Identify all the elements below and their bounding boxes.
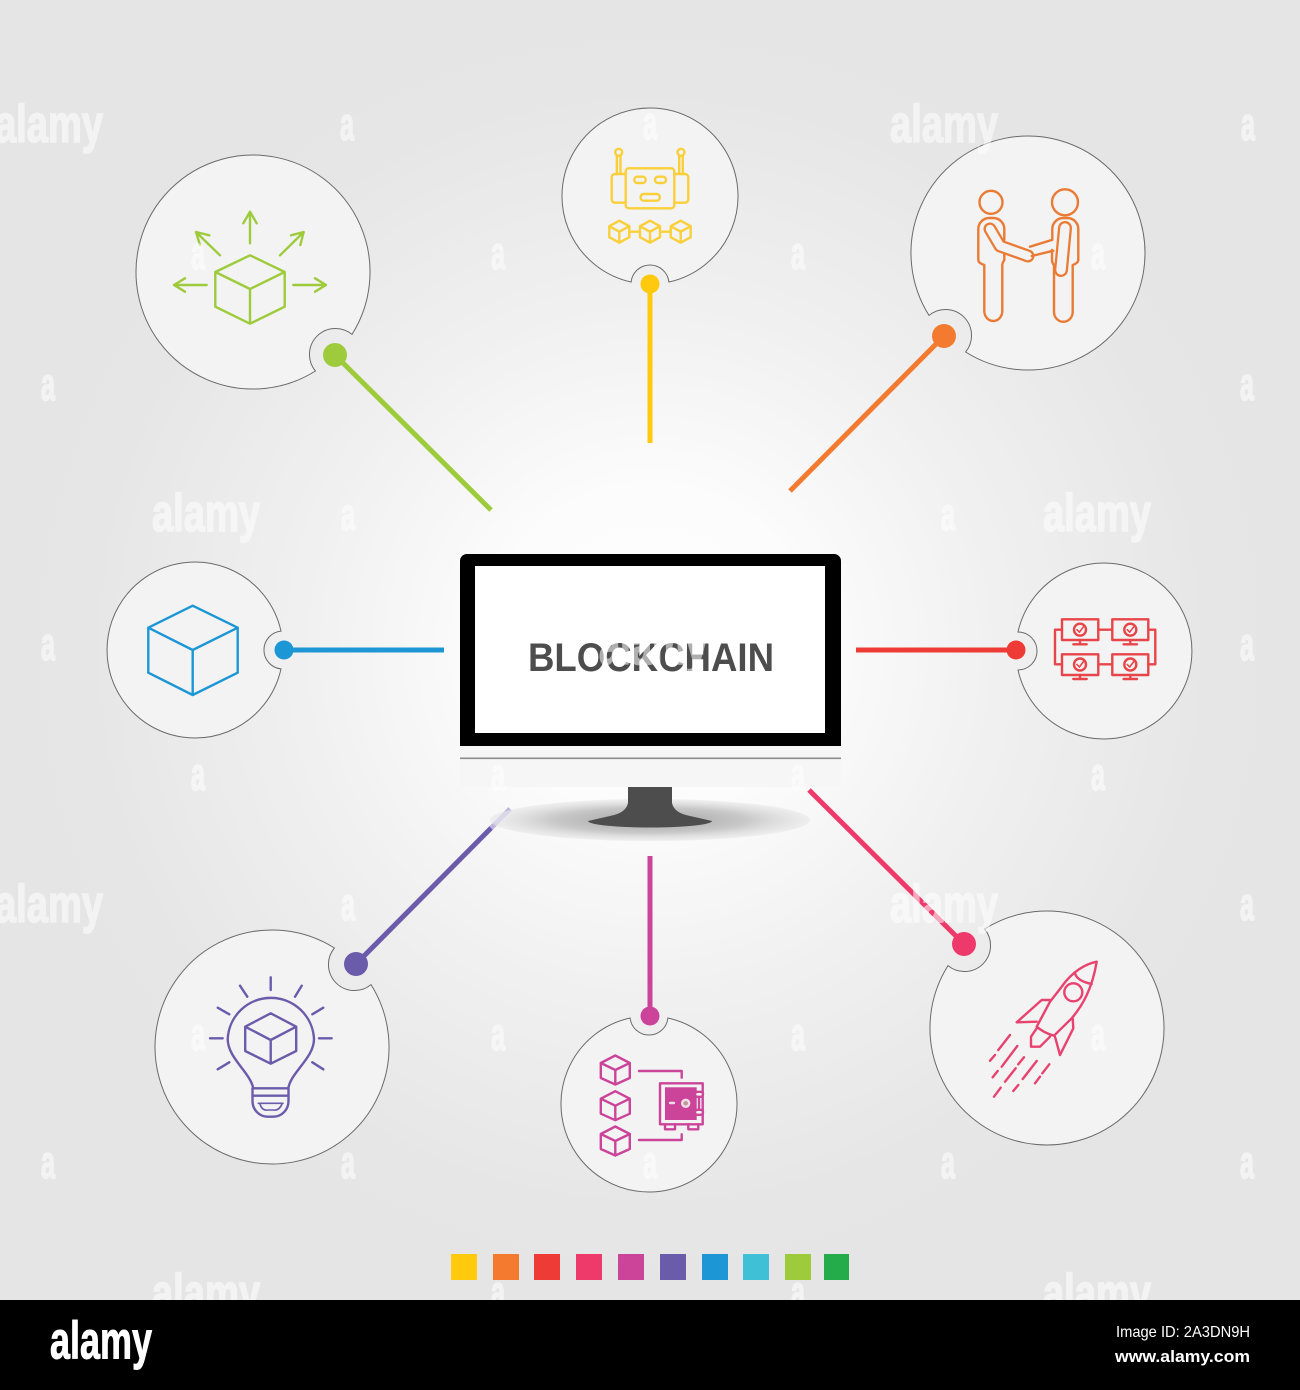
- watermarks: a: [41, 1136, 55, 1188]
- watermarks: alamy: [152, 1264, 260, 1323]
- circle with notch: [911, 136, 1145, 370]
- monitor screen: [475, 566, 825, 733]
- watermarks: a: [1240, 1136, 1254, 1188]
- circle with notch: [561, 1018, 737, 1192]
- panel: magenta safe: [561, 856, 737, 1192]
- watermarks: a: [791, 227, 805, 279]
- footer logo: alamy: [50, 1312, 152, 1370]
- circle with notch: [1018, 563, 1192, 739]
- icon: handshake: [978, 189, 1078, 322]
- watermarks: a: [1240, 618, 1254, 670]
- watermarks: a: [191, 1008, 205, 1060]
- watermarks: a: [341, 878, 355, 930]
- icon: light bulb with cube: [210, 977, 332, 1117]
- watermarks: a: [191, 227, 205, 279]
- panel: yellow robot: [562, 108, 738, 443]
- icon: robot and chain: [609, 149, 691, 243]
- watermarks: a: [1091, 227, 1105, 279]
- icon: rocket: [990, 962, 1097, 1097]
- watermarks: a: [1241, 98, 1255, 150]
- image id: Image ID: 2A3DN9H: [1116, 1324, 1250, 1341]
- icon: cube: [148, 606, 238, 695]
- watermarks: a: [340, 98, 354, 150]
- panel: orange handshake: [790, 136, 1145, 491]
- watermarks: a: [643, 97, 657, 149]
- connector line and dot: [856, 640, 1026, 660]
- colour swatches: [451, 1254, 849, 1280]
- connector line and dot: [809, 790, 976, 956]
- watermarks: a: [341, 1136, 355, 1188]
- watermarks: alamy: [890, 875, 998, 934]
- watermarks: a: [341, 488, 355, 540]
- circle with notch: [107, 562, 281, 738]
- watermarks: a: [1091, 748, 1105, 800]
- watermarks: a: [1091, 1008, 1105, 1060]
- website: www.alamy.com: [1114, 1347, 1250, 1366]
- watermarks: alamy: [152, 484, 260, 543]
- monitor bezel line: [460, 758, 841, 759]
- panel: purple light bulb: [155, 809, 510, 1164]
- monitor chin: [460, 746, 841, 787]
- panel: red network monitors: [856, 563, 1192, 739]
- watermarks: a: [41, 618, 55, 670]
- watermarks: a: [1240, 358, 1254, 410]
- circle with notch: [155, 930, 389, 1164]
- watermarks: a: [791, 1266, 805, 1318]
- panel: green box arrows: [136, 155, 491, 510]
- watermarks: a: [191, 748, 205, 800]
- connector line and dot: [640, 274, 660, 443]
- watermarks: a: [791, 1008, 805, 1060]
- watermarks: a: [941, 1136, 955, 1188]
- monitor frame: [460, 554, 841, 746]
- panel: pink rocket: [809, 790, 1164, 1145]
- title: BLOCKCHAIN: [528, 636, 774, 680]
- central monitor: [460, 554, 841, 841]
- icon: box with arrows: [174, 212, 326, 324]
- watermarks: a: [643, 1136, 657, 1188]
- watermarks: a: [491, 1266, 505, 1318]
- circle with notch: [136, 155, 370, 389]
- watermarks: a: [941, 488, 955, 540]
- connector line and dot: [640, 856, 660, 1026]
- circle with notch: [562, 108, 738, 282]
- connector line and dot: [344, 809, 510, 976]
- watermarks: a: [791, 748, 805, 800]
- watermarks: alamy: [1043, 484, 1151, 543]
- connector line and dot: [274, 640, 444, 660]
- icon: blocks into safe: [601, 1056, 703, 1156]
- circle with notch: [930, 911, 1164, 1145]
- panel: blue cube: [107, 562, 444, 738]
- watermarks: alamy: [890, 95, 998, 154]
- watermarks: a: [491, 1008, 505, 1060]
- watermarks: a: [41, 358, 55, 410]
- monitor shadow: [490, 799, 810, 841]
- footer bar: [0, 1300, 1300, 1390]
- watermarks: alamy: [1043, 1264, 1151, 1323]
- connector line and dot: [323, 343, 491, 510]
- watermarks: a: [1240, 878, 1254, 930]
- connector line and dot: [790, 324, 956, 491]
- watermarks: alamy: [599, 617, 707, 676]
- monitor stand: [588, 787, 712, 828]
- icon: connected monitors: [1055, 619, 1155, 679]
- watermarks: a: [491, 227, 505, 279]
- watermarks: a: [491, 748, 505, 800]
